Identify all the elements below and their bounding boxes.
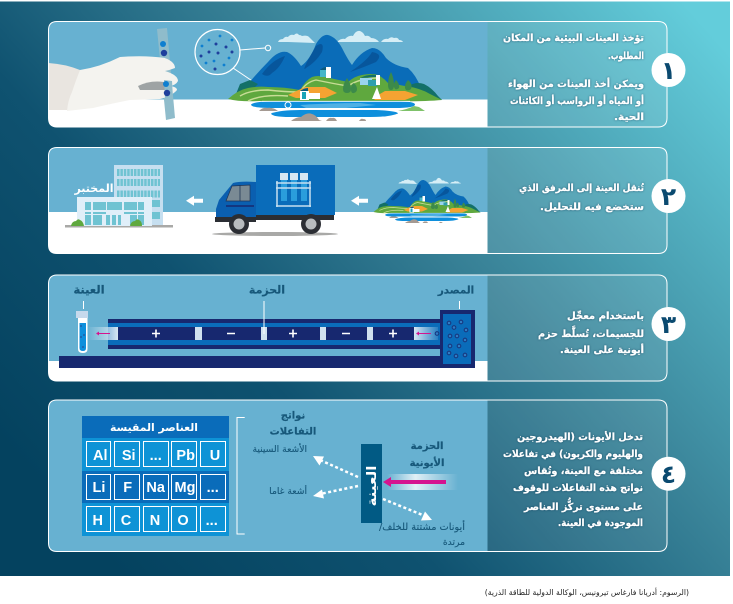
step text 2: ستخضع فيه للتحليل. (540, 202, 644, 213)
step text 1: تؤخذ العينات البيئية من المكان (503, 33, 644, 44)
table: measured elements (82, 416, 229, 536)
arrow: gamma emission (313, 486, 358, 498)
panel 2: transport (48, 148, 686, 254)
step text 4: الموجودة في العينة. (558, 518, 643, 529)
step text 3: للجسيمات، تُسلَّط حزم (538, 325, 644, 340)
step text 1 (503, 33, 644, 123)
table: measured elements: Na (146, 480, 166, 496)
step text 4 (503, 431, 643, 529)
step text 4: مختلفة مع العينة، وتُقاس (524, 466, 643, 477)
step number 2 (652, 179, 686, 213)
label: reaction products: نواتج (281, 410, 305, 422)
table: measured elements: U (210, 448, 220, 464)
arrow: X-ray emission (313, 456, 358, 477)
step text 1: الحية. (614, 112, 644, 123)
panel 1: sampling (48, 22, 686, 127)
label: sample: العينة (73, 282, 105, 296)
table: measured elements: Pb (176, 448, 195, 464)
ion source (435, 310, 475, 368)
label: backscattered ions: مرتدة (443, 537, 465, 548)
illustration: small island (374, 178, 480, 223)
sample test tube (76, 311, 88, 353)
bracket (237, 418, 245, 534)
label: reaction products (270, 410, 316, 438)
panel 4: reactions (48, 400, 686, 552)
label: beam: الحزمة (249, 284, 285, 296)
credit line: (الرسوم: أدريانا فارغاس تيرونيس، الوكالة الدولية للطاقة الذرية) (485, 587, 689, 597)
label: X-rays: الأشعة السينية (252, 443, 307, 455)
table: measured elements: ... (150, 448, 162, 464)
label: source (437, 284, 474, 309)
table: measured elements: Si (122, 448, 136, 464)
step text 2: تُنقل العينة إلى المرفق الذي (519, 183, 644, 194)
step number 1 (652, 53, 686, 87)
label: source: المصدر (437, 284, 474, 296)
step text 4: نواتج هذه التفاعلات للوقوف (513, 483, 643, 494)
table: measured elements: C (121, 513, 132, 529)
step text 1: أو المياه أو الرواسب أو الكائنات (510, 94, 644, 107)
table: measured elements: ... (206, 513, 218, 529)
table: measured elements: ... (207, 480, 219, 496)
step number 3 (652, 307, 686, 341)
label: ion beam (410, 441, 444, 469)
step text 4: والهليوم والكربون) في تفاعلات (503, 449, 643, 460)
icon: laboratory building (65, 165, 173, 228)
sample block (361, 444, 382, 523)
step text 1: ويمكن أخذ العينات من الهواء (508, 77, 644, 90)
step number 4 (652, 457, 686, 491)
illustration: island landscape (228, 31, 442, 121)
accelerator base (59, 356, 475, 368)
panel 3: accelerator (48, 275, 686, 381)
table heading: العناصر المقيسة (110, 421, 198, 434)
step text 2 (519, 183, 644, 213)
label: beam (249, 284, 285, 334)
step text 3 (538, 310, 644, 356)
step number 2: ٢ (661, 182, 676, 211)
table: measured elements: Mg (175, 480, 195, 496)
arrow: backscattered ions (383, 499, 432, 520)
label: ion beam: الأيونية (410, 456, 444, 469)
sample block: العينة (365, 466, 380, 506)
label: sample (73, 282, 105, 309)
table: measured elements: H (92, 513, 103, 529)
step number 4: ٤ (661, 460, 676, 489)
table: measured elements: Al (93, 448, 108, 464)
table: measured elements: F (123, 480, 132, 496)
table: measured elements: O (177, 513, 189, 529)
table: measured elements: N (150, 513, 160, 529)
step text 4: تدخل الأيونات (الهيدروجين (517, 431, 643, 443)
icon: sample rack (276, 173, 311, 207)
step number 3: ٣ (661, 310, 676, 339)
step text 1: المطلوب. (608, 51, 644, 62)
arrow: ion beam (383, 474, 458, 490)
beam tube (87, 319, 440, 349)
label: gamma rays: أشعة غاما (269, 485, 307, 497)
icon: truck with samples (212, 165, 338, 236)
label: laboratory: المختبر (73, 182, 114, 195)
icon: magnified sample circle (195, 30, 285, 103)
arrow: to laboratory (186, 196, 203, 206)
label: reaction products: التفاعلات (270, 426, 316, 438)
step number 1: ١ (661, 56, 676, 85)
label: ion beam: الحزمة (411, 441, 443, 452)
step text 3: باستخدام معجِّل (567, 310, 644, 322)
step text 3: أيونية على العينة. (560, 343, 644, 356)
label: backscattered ions: أيونات مشتتة للخلف/ (379, 520, 465, 533)
label: backscattered ions (379, 520, 465, 548)
arrow: to truck (351, 196, 368, 206)
step text 4: على مستوى تركُّز العناصر (523, 496, 643, 513)
table: measured elements: Li (93, 480, 105, 496)
icon: gloved hand with test tube (48, 28, 178, 120)
